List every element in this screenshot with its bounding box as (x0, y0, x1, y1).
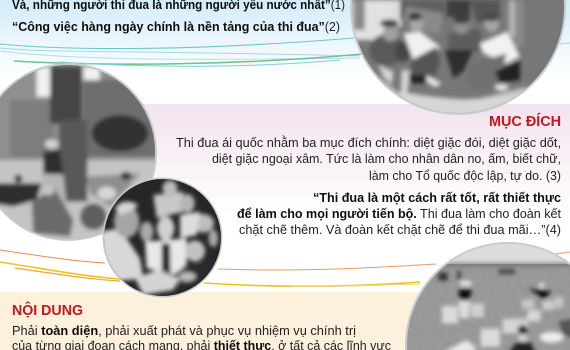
decorative wave lines: blue and green (0, 38, 570, 66)
text block: purpose description (176, 135, 561, 183)
heading: content: NỘI DUNG (12, 301, 83, 319)
text block: opening quotes: “Công việc hàng ngày chính là nền tảng của thi đua”(2) (12, 20, 340, 34)
photo: blackboard under a tree (0, 53, 160, 247)
panel: purpose pink band (0, 104, 570, 216)
text block: content description: Phải toàn diện, phải xuất phát và phục vụ nhiệm vụ chính trị (12, 324, 356, 338)
text block: purpose quote: “Thi đua là một cách rất tốt, rất thiết thực (313, 191, 561, 205)
text block: content description (12, 324, 391, 350)
text block: purpose quote (237, 191, 561, 237)
text block: purpose description: làm cho Tổ quốc độc lập, tự do. (3) (369, 169, 561, 183)
text block: purpose description: Thi đua ái quốc nhằm ba mục đích chính: diệt giặc đói, diệt giặc dốt, (176, 135, 561, 150)
text block: opening quotes (12, 0, 345, 34)
panel: content cream band (0, 292, 570, 350)
text block: purpose quote: chặt chẽ thêm. Và đoàn kết chặt chẽ để thi đua mãi…”(4) (239, 223, 561, 237)
background: top blue gradient (0, 0, 570, 78)
photo: workers sitting and talking (350, 0, 566, 115)
photo: President with young students (100, 175, 225, 300)
text block: purpose description: diệt giặc ngoại xâm. Tức là làm cho nhân dân no, ấm, biết chữ, (212, 152, 561, 166)
text block: purpose quote: để làm cho mọi người tiến bộ. Thi đua làm cho đoàn kết (237, 207, 561, 221)
decorative wave lines: orange and yellow (0, 250, 570, 286)
heading: purpose: MỤC ĐÍCH (489, 113, 561, 130)
photo: farmers harvesting in a field (400, 240, 570, 350)
